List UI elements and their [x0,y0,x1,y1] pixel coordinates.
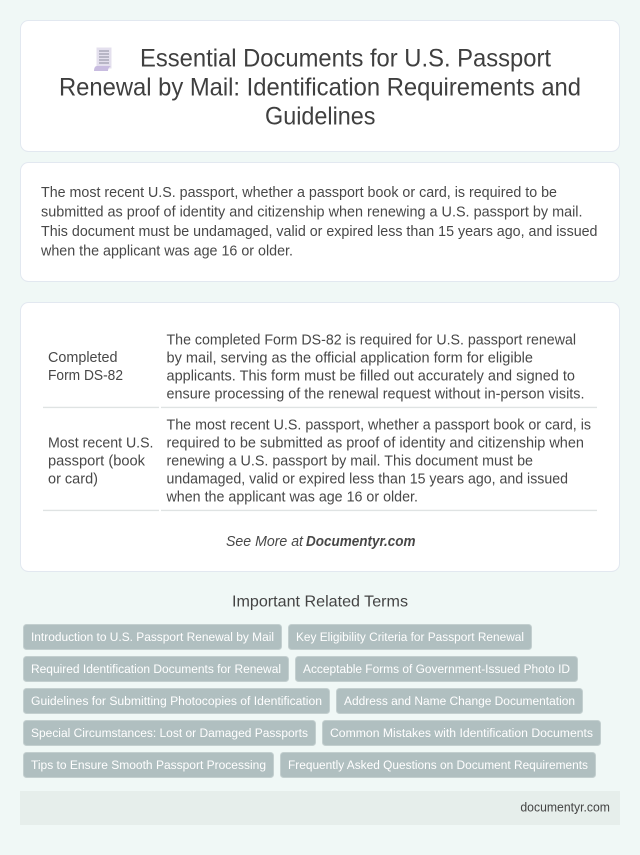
summary text: This document must be undamaged, valid or expired less than 15 years ago, and issued [41,224,598,240]
row description [166,417,591,505]
heading: related terms: Important Related Terms [232,594,408,611]
tag: Introduction to U.S. Passport Renewal by Mail [31,630,274,644]
tag [280,752,596,778]
tag [24,688,330,714]
panel: summary [20,162,620,282]
tag [24,752,274,778]
row description: applicants. This form must be filled out accurately and signed to [166,368,575,384]
footer bar [20,791,620,825]
table row: Completed Form DS-82 [48,332,584,402]
related term tags [24,624,600,778]
row label: passport (book [48,454,146,470]
tag: Address and Name Change Documentation [344,694,575,708]
row label: Completed [48,350,118,366]
see more link: See More at [226,534,304,550]
tag [288,624,532,650]
row description: The completed Form DS-82 is required for U.S. passport renewal [166,332,576,348]
tag: Acceptable Forms of Government-Issued Photo ID [303,662,570,676]
tag: Key Eligibility Criteria for Passport Renewal [296,630,524,644]
row description: by mail, serving as the official application form for eligible [166,350,533,366]
see more link [226,534,416,550]
tag: Frequently Asked Questions on Document Requirements [288,758,588,772]
row description: when the applicant was age 16 or older. [166,489,418,505]
tag: Common Mistakes with Identification Documents [330,726,593,740]
summary text: submitted as proof of identity and citizenship when renewing a U.S. passport by mail. [41,205,582,221]
row label [48,350,123,384]
tag [24,624,282,650]
tag: Required Identification Documents for Renewal [31,662,281,676]
row description: renewing a U.S. passport by mail. This document must be [166,453,533,469]
footer bar: documentyr.com [520,801,610,815]
panel: document table [20,302,620,572]
row description: required to be submitted as proof of identity and citizenship when [166,435,584,451]
summary text: The most recent U.S. passport, whether a passport book or card, is required to be [41,185,557,201]
tag: Guidelines for Submitting Photocopies of Identification [31,694,322,708]
tag [322,720,600,746]
row description: undamaged, valid or expired less than 15 years ago, and issued [166,471,568,487]
see more link: Documentyr.com [306,534,416,550]
tag [24,656,288,682]
tag [336,688,582,714]
row label: Form DS-82 [48,368,123,384]
row label: Most recent U.S. [48,436,154,452]
row label [48,436,154,488]
title [59,45,581,130]
title: Renewal by Mail: Identification Requirements and [59,74,581,102]
row description: The most recent U.S. passport, whether a passport book or card, is [166,417,591,433]
title: Essential Documents for U.S. Passport [140,45,551,73]
tag [24,720,316,746]
title: Guidelines [265,102,376,130]
row description: ensure processing of the renewal request without in-person visits. [166,386,584,402]
icon: scroll document [94,48,112,71]
tag [296,656,578,682]
row description [166,332,584,402]
tag: Tips to Ensure Smooth Passport Processing [31,758,266,772]
summary text [40,185,598,260]
summary text: when the applicant was age 16 or older. [40,244,293,260]
row label: or card) [48,472,98,488]
tag: Special Circumstances: Lost or Damaged Passports [31,726,308,740]
panel: title card [20,20,620,152]
table row: Most recent U.S. passport [48,417,591,505]
